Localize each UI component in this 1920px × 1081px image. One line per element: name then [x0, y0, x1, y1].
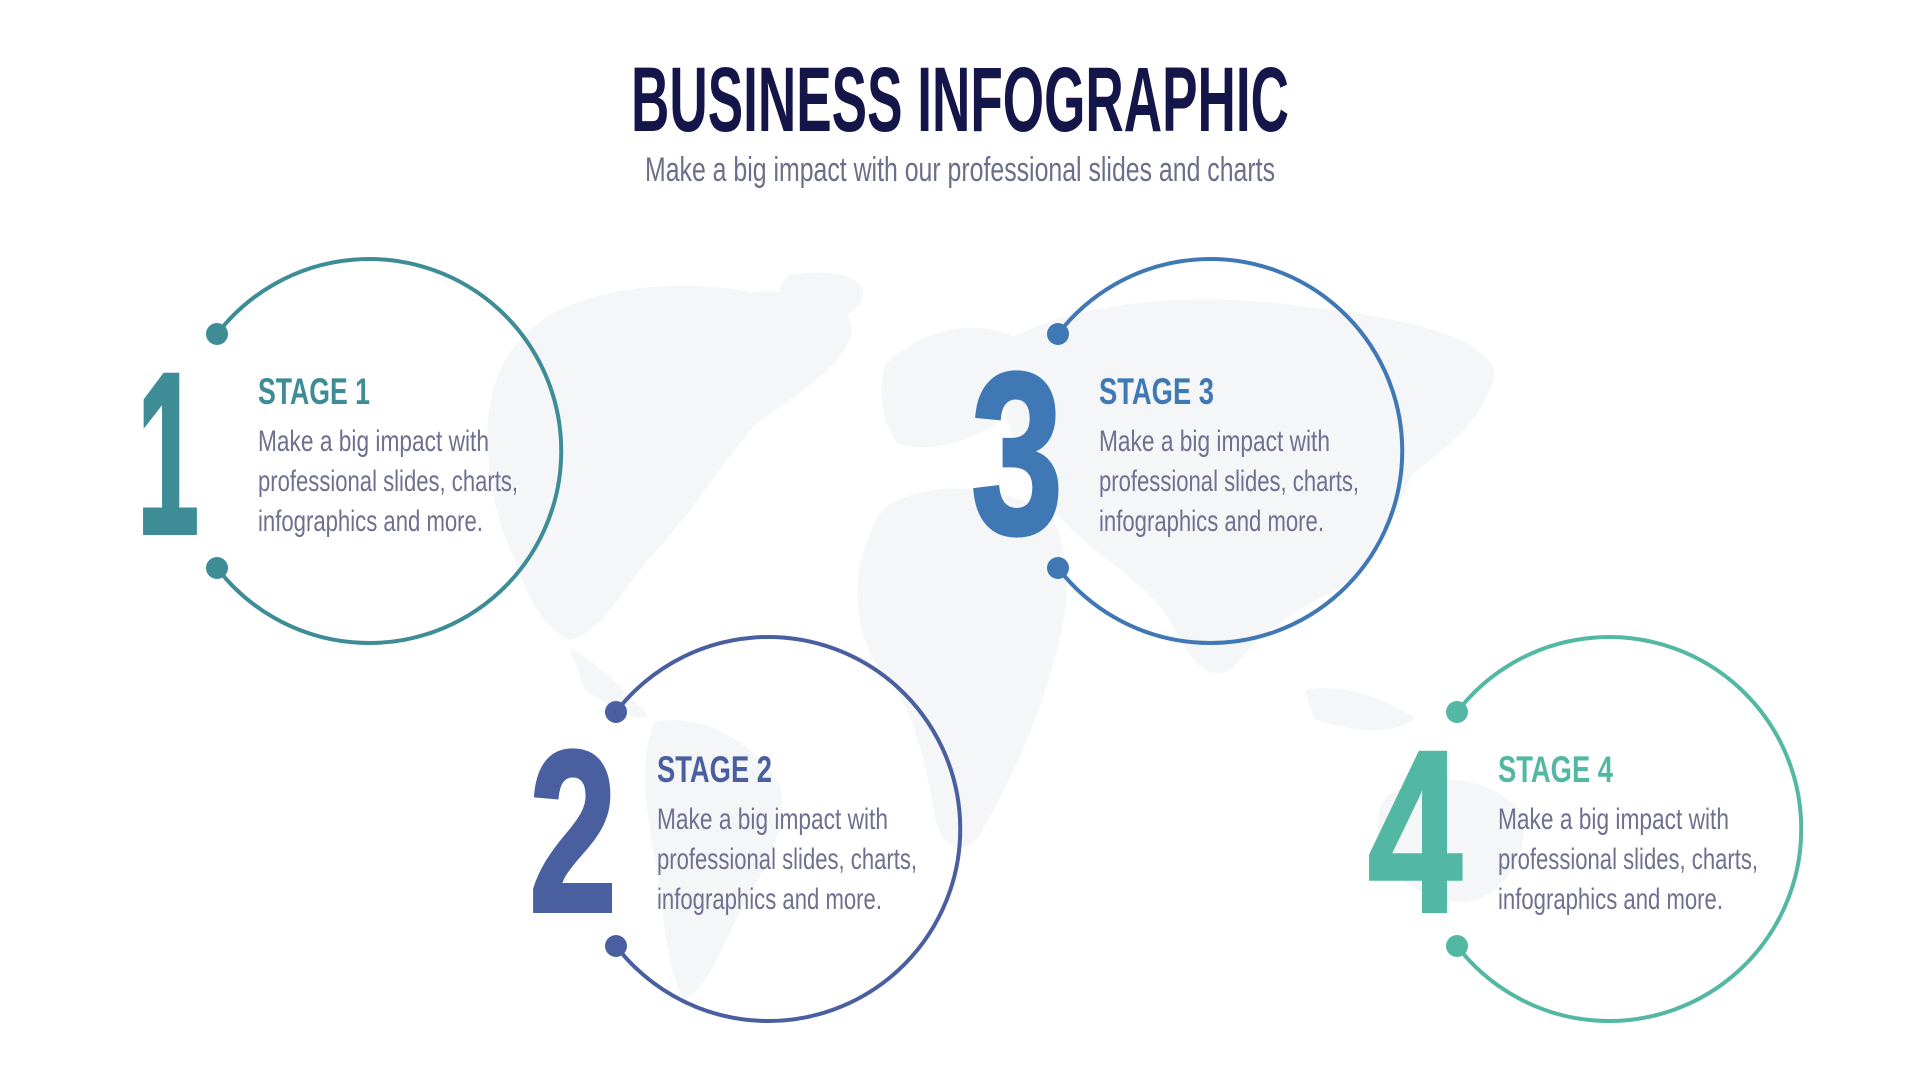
stage 2: professional slides, charts,	[657, 843, 917, 876]
Africa	[857, 488, 1067, 848]
stage 3	[971, 259, 1402, 643]
world map background	[487, 272, 1523, 998]
subtitle: Make a big impact with our professional slides and charts	[645, 151, 1275, 189]
stage 2: STAGE 2	[657, 749, 772, 790]
stage 3: STAGE 3	[1099, 371, 1214, 412]
stage 1: STAGE 1	[258, 371, 370, 412]
stage 1: Make a big impact with	[258, 425, 489, 458]
Greenland	[780, 272, 863, 326]
title: BUSINESS INFOGRAPHIC	[631, 49, 1289, 151]
stage 2: Make a big impact with	[657, 803, 888, 836]
South America	[645, 720, 782, 998]
North America	[487, 286, 852, 640]
stage 2: infographics and more.	[657, 883, 882, 916]
stage 4: 4	[1368, 703, 1462, 960]
stage 4: STAGE 4	[1498, 749, 1613, 790]
stage 3: infographics and more.	[1099, 505, 1324, 538]
Southeast Asia islands	[1305, 688, 1415, 730]
stage 2	[529, 637, 960, 1021]
stage 4: infographics and more.	[1498, 883, 1723, 916]
stage 2: 2	[529, 703, 617, 960]
stage 3: Make a big impact with	[1099, 425, 1330, 458]
stage 4: professional slides, charts,	[1498, 843, 1758, 876]
Europe	[881, 328, 1019, 447]
stage 1: professional slides, charts,	[258, 465, 518, 498]
stage 1: infographics and more.	[258, 505, 483, 538]
Australia	[1378, 780, 1523, 902]
Central America	[570, 648, 648, 718]
Asia	[1002, 299, 1495, 674]
stage 3: professional slides, charts,	[1099, 465, 1359, 498]
stage 4: Make a big impact with	[1498, 803, 1729, 836]
stage 3: 3	[971, 325, 1063, 582]
stage 1: 1	[137, 325, 199, 582]
stage 4	[1368, 637, 1801, 1021]
stage 1	[137, 259, 561, 643]
